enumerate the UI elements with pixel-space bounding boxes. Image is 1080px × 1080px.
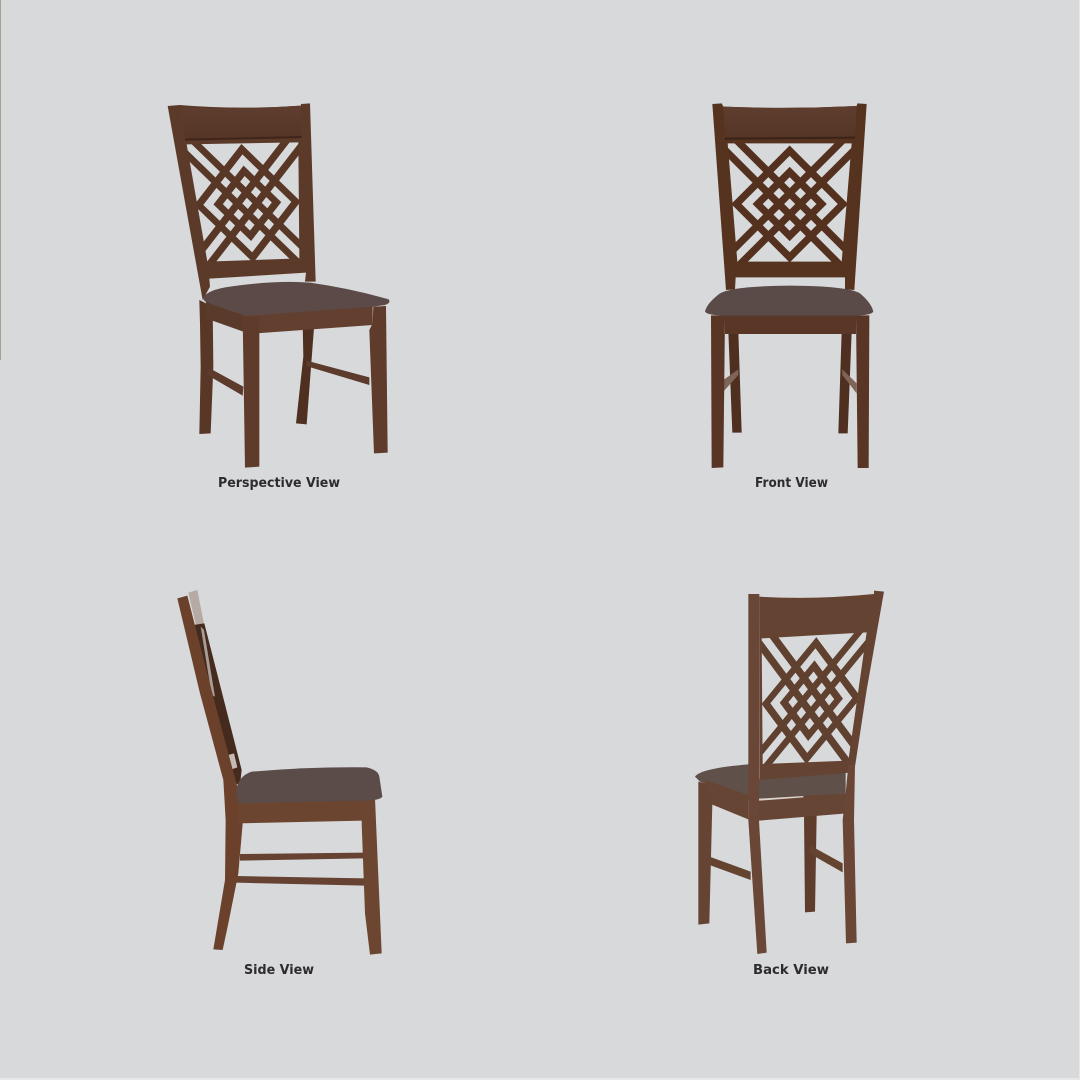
bottom rail edge	[228, 753, 237, 769]
back frame	[759, 591, 884, 780]
chair: front view	[705, 103, 874, 468]
right lower post and leg	[843, 765, 857, 943]
caption: front view: Front View	[755, 476, 828, 491]
stretchers	[207, 361, 369, 396]
top rail	[723, 106, 857, 138]
front left leg	[243, 317, 259, 468]
aprons	[705, 780, 847, 821]
lattice	[728, 143, 852, 262]
front right leg	[369, 306, 388, 453]
side apron	[206, 295, 250, 334]
chair: perspective view	[150, 103, 389, 468]
back legs	[728, 332, 852, 433]
far left leg	[698, 782, 712, 925]
top rail	[180, 106, 302, 139]
front leg	[362, 798, 382, 955]
back frame	[712, 103, 867, 290]
rear middle leg	[804, 815, 817, 912]
rear left leg	[199, 300, 213, 434]
chair: side view	[177, 590, 382, 955]
side apron	[238, 797, 363, 823]
near left post and leg	[748, 594, 767, 954]
chair: back view	[695, 591, 901, 954]
caption: perspective view: Perspective View	[218, 476, 340, 491]
stretchers	[705, 845, 843, 880]
front legs	[711, 315, 869, 468]
side stretchers	[236, 853, 365, 886]
caption: back view: Back View	[753, 963, 829, 978]
front apron	[243, 302, 373, 334]
light gap under seat	[759, 796, 803, 801]
back frame	[168, 103, 316, 300]
top rail edge	[188, 590, 204, 625]
lattice edge	[193, 623, 242, 785]
back post and rear leg	[177, 596, 243, 950]
caption: side view: Side View	[244, 963, 314, 978]
seat cushion	[236, 767, 382, 803]
front apron	[725, 312, 856, 334]
back right leg	[296, 323, 314, 424]
lattice	[762, 632, 866, 764]
side stretchers	[723, 369, 857, 393]
lattice	[188, 142, 300, 262]
seat cushion	[203, 282, 389, 316]
seat cushion	[695, 764, 846, 802]
lattice light slit	[201, 627, 215, 697]
seat cushion	[705, 286, 873, 316]
